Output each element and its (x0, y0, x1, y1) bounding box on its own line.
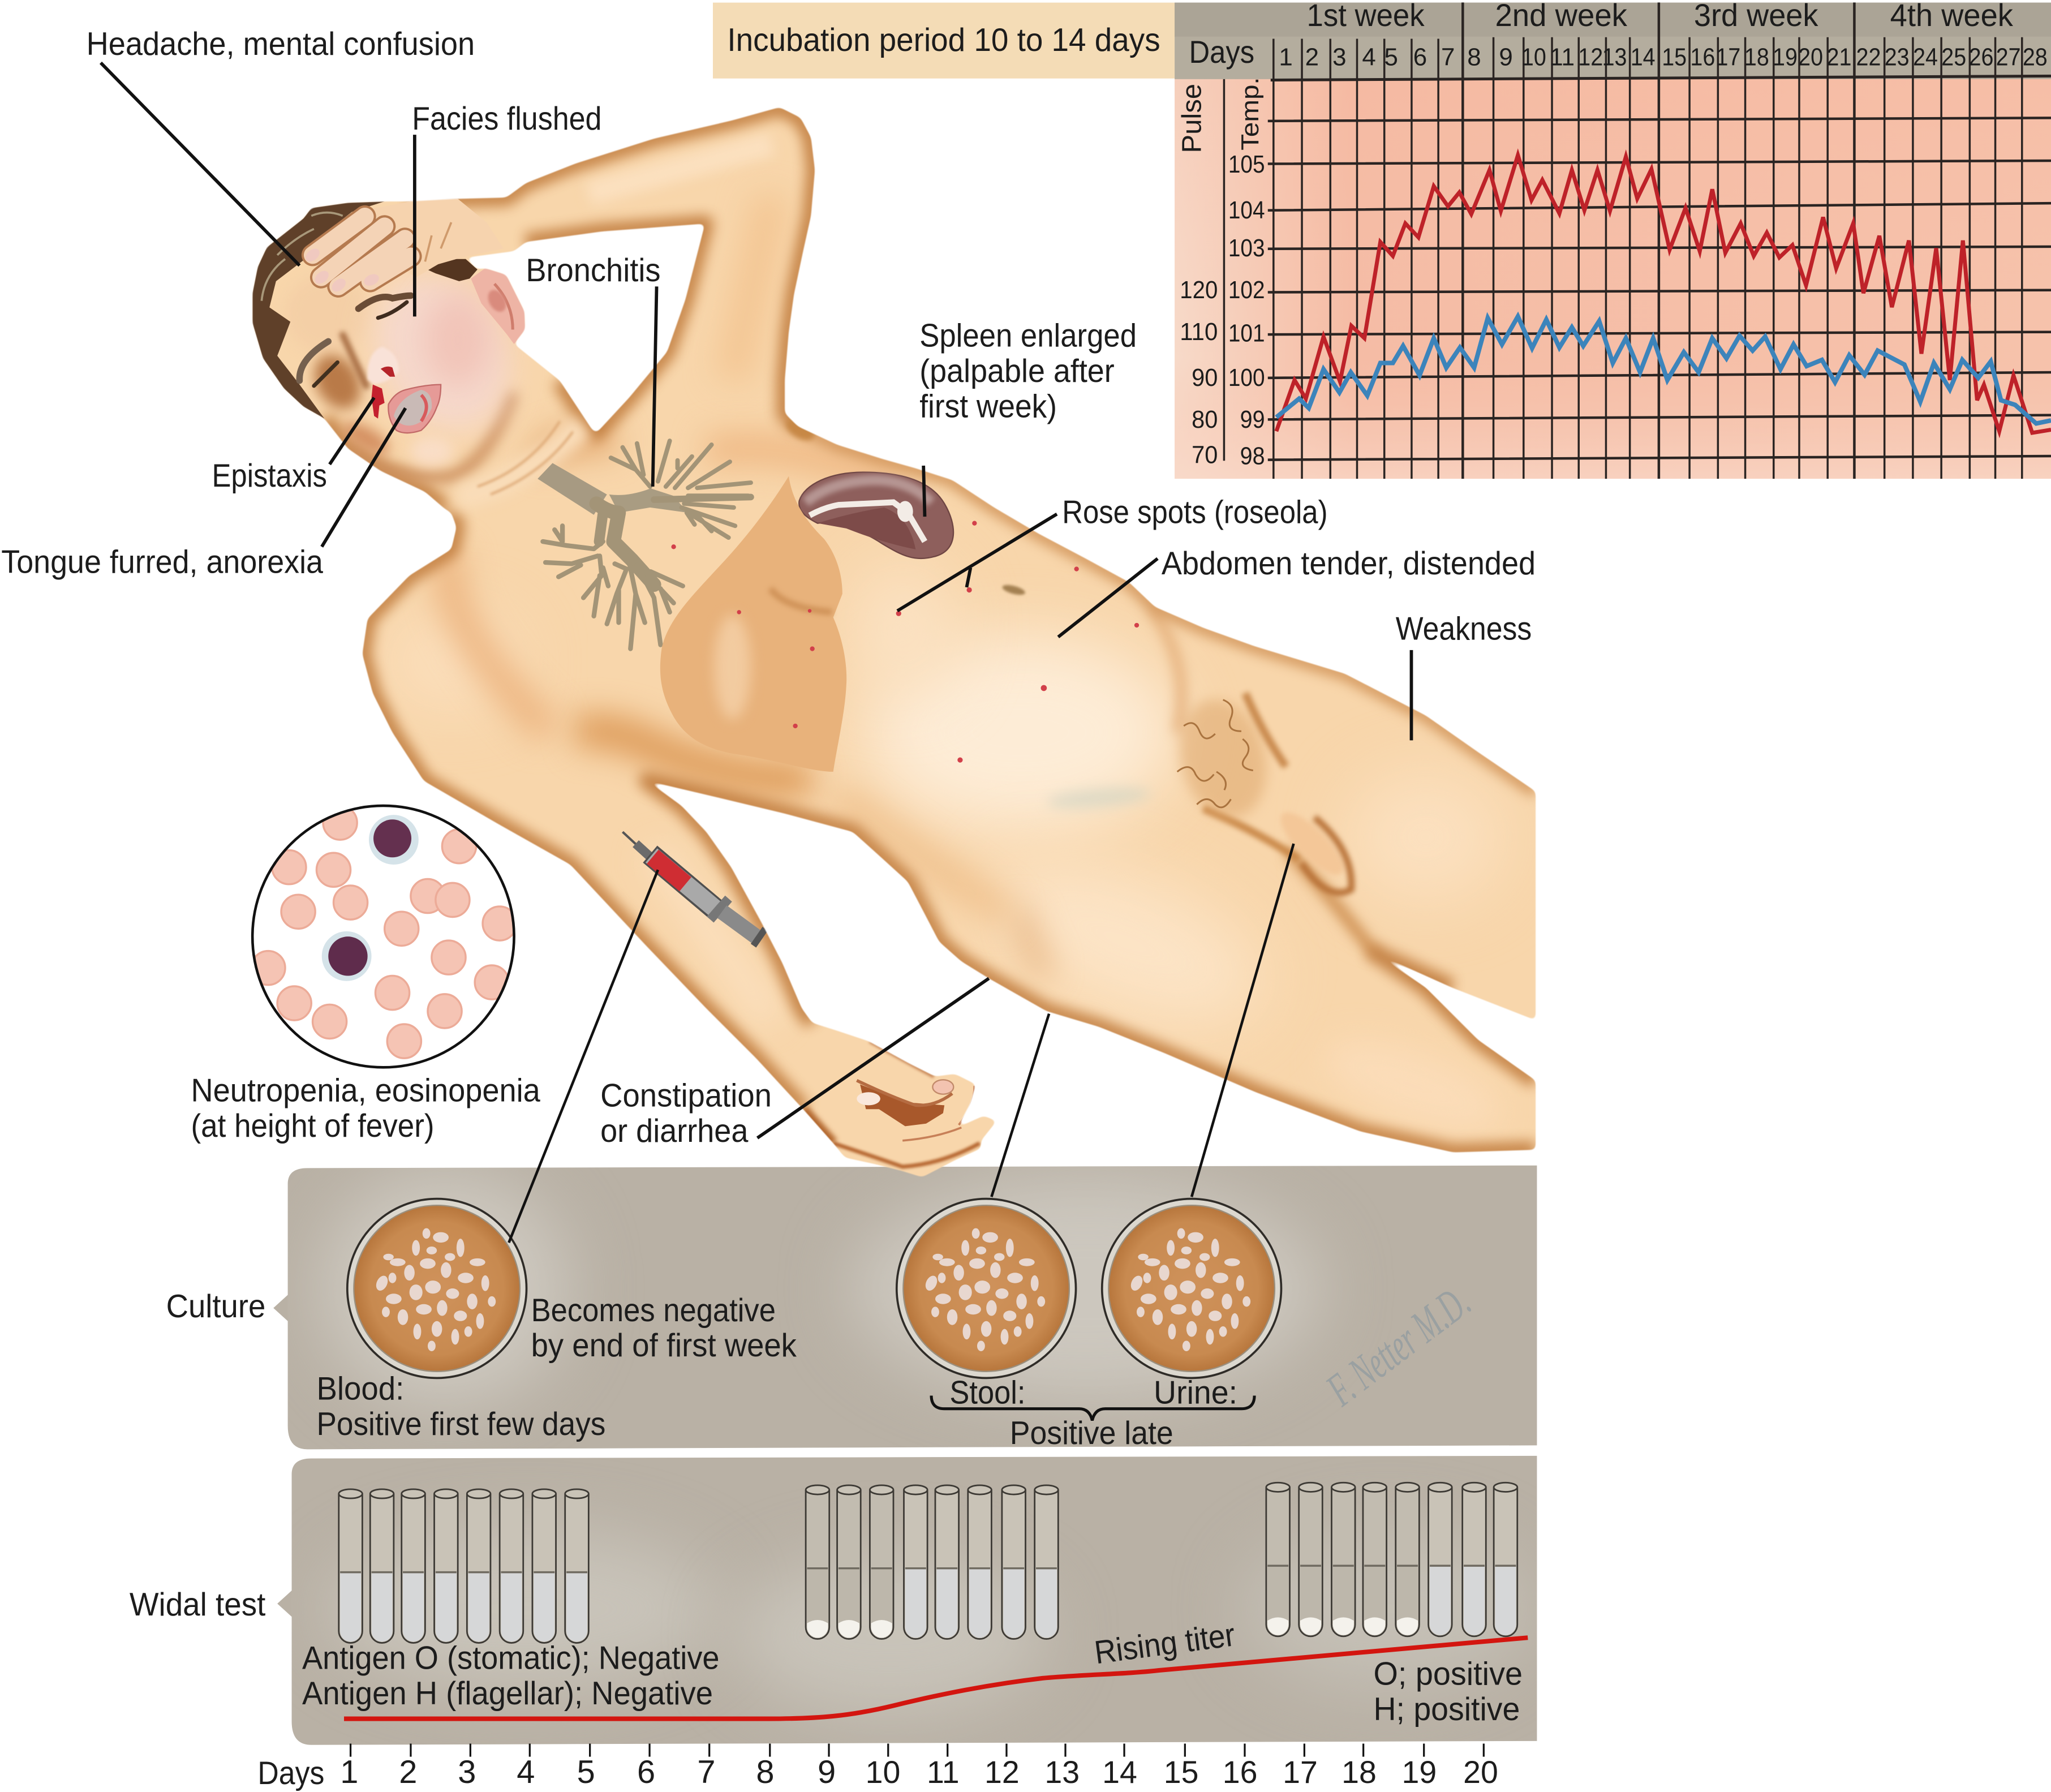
day axis: 10 (866, 1755, 900, 1790)
skin edge darkening: arm, shoulder and underside (324, 108, 1536, 1153)
temperature scale: 101 (1228, 319, 1265, 347)
day numbers: 26 (1969, 44, 1994, 71)
day axis: 16 (1223, 1755, 1257, 1790)
day numbers: 4 (1362, 44, 1376, 71)
day numbers: 2 (1305, 44, 1319, 71)
groin shading (1167, 690, 1352, 893)
label: antigen H negative: Antigen H (flagellar); Negative (302, 1675, 713, 1712)
label: becomes negative: Becomes negative (531, 1292, 776, 1329)
day numbers: 16 (1690, 44, 1715, 71)
label: neutropenia (191, 1072, 541, 1144)
shading on arm, chest, thigh (386, 144, 1510, 1149)
syringe (622, 832, 765, 946)
illustration: patient figure (235, 92, 1543, 1191)
navel (1001, 583, 1026, 597)
label: H positive: H; positive (1373, 1691, 1520, 1727)
culture dish: urine (1102, 1199, 1281, 1378)
day numbers: 24 (1913, 44, 1938, 71)
temperature line (1276, 155, 2051, 433)
label: by end of first week: by end of first week (531, 1327, 797, 1364)
label: headache: Headache, mental confusion (87, 26, 475, 62)
day numbers: 18 (1744, 44, 1769, 71)
label: positive late: Positive late (1010, 1415, 1173, 1451)
label: bronchitis: Bronchitis (526, 252, 660, 289)
day numbers: 14 (1631, 44, 1656, 71)
liver (660, 476, 846, 772)
hair (252, 201, 478, 419)
temperature scale: 100 (1228, 364, 1265, 392)
day axis: 6 (637, 1754, 655, 1790)
day numbers: 23 (1885, 44, 1910, 71)
inset: blood smear circle (251, 806, 517, 1067)
day axis: 17 (1283, 1755, 1318, 1790)
nose with epistaxis (367, 347, 399, 419)
day axis: 2 (399, 1754, 417, 1790)
day axis: 5 (577, 1754, 595, 1790)
temperature scale: 99 (1240, 406, 1265, 433)
mouth with furred tongue (388, 385, 441, 433)
day axis: 1 (340, 1754, 358, 1790)
leader lines (101, 63, 1411, 1243)
panel: Widal test (277, 1456, 1537, 1745)
temperature scale: 102 (1228, 276, 1265, 304)
day axis: 12 (984, 1755, 1020, 1790)
week headings (1307, 0, 2013, 33)
day axis: 18 (1341, 1755, 1377, 1790)
label: epistaxis: Epistaxis (212, 458, 327, 494)
label: culture: Culture (166, 1288, 265, 1325)
hand on forehead (303, 199, 504, 294)
day numbers (1279, 44, 2048, 71)
label: blood: Blood: (316, 1370, 404, 1407)
label: rose spots: Rose spots (roseola) (1062, 495, 1328, 531)
day numbers: 3 (1332, 44, 1347, 71)
face (285, 252, 537, 466)
label: facies flushed: Facies flushed (412, 101, 601, 137)
signature: F. Netter M.D. (1317, 1275, 1480, 1416)
pulse scale: 110 (1180, 318, 1218, 346)
axis title: temp: Temp. (1236, 77, 1264, 151)
pulse line (1276, 316, 2051, 423)
day numbers: 20 (1798, 44, 1823, 71)
chart grid (1224, 2, 2051, 479)
panel: culture (273, 1166, 1537, 1451)
spleen (799, 472, 953, 558)
callout: incubation period (713, 3, 1175, 79)
day numbers: 1 (1279, 44, 1293, 71)
day numbers: 17 (1715, 44, 1740, 71)
eyes and brows (299, 295, 411, 386)
label: stool: Stool: (949, 1374, 1025, 1411)
days heading: Days (1189, 35, 1254, 70)
axis title: pulse: Pulse (1176, 84, 1207, 153)
day numbers: 27 (1996, 44, 2021, 71)
temperature scale: 105 (1228, 151, 1265, 178)
label: spleen enlarged (919, 318, 1137, 424)
label: neutropenia: Neutropenia, eosinopenia (191, 1072, 541, 1108)
label: rising titer: Rising titer (1093, 1617, 1237, 1671)
test tubes: first group (339, 1489, 588, 1643)
day numbers: 28 (2023, 44, 2048, 71)
label: weakness: Weakness (1396, 611, 1532, 647)
chart background (1175, 3, 2051, 479)
label: urine: Urine: (1154, 1374, 1237, 1411)
day numbers: 7 (1441, 44, 1455, 71)
day numbers: 9 (1499, 44, 1513, 71)
label: constipation: Constipation (600, 1078, 772, 1114)
day axis: 15 (1164, 1755, 1198, 1790)
day axis: 14 (1102, 1755, 1137, 1790)
day numbers: 22 (1856, 44, 1881, 71)
day numbers: 21 (1827, 44, 1851, 71)
temperature scale: 104 (1228, 196, 1265, 224)
day numbers: 13 (1602, 44, 1627, 71)
rising titer curve (344, 1638, 1528, 1719)
test tubes: second group (806, 1485, 1058, 1639)
day axis: 11 (927, 1755, 960, 1790)
day numbers: 19 (1773, 44, 1798, 71)
day axis: 9 (818, 1754, 836, 1790)
day numbers: 10 (1521, 44, 1546, 71)
day numbers: 15 (1662, 44, 1687, 71)
hand with cupped palm (803, 1041, 980, 1167)
day axis: 4 (517, 1754, 535, 1790)
label: tongue: Tongue furred, anorexia (1, 544, 324, 581)
pulse scale: 70 (1192, 441, 1218, 469)
label: neutropenia: (at height of fever) (191, 1108, 435, 1144)
culture dish: blood (347, 1199, 527, 1378)
white blood cell (369, 815, 419, 865)
pulse scale: 120 (1180, 276, 1218, 304)
skin edge darkening: upper torso and leg (798, 427, 1536, 792)
day axis: 8 (756, 1754, 775, 1790)
day axis: 3 (458, 1754, 476, 1790)
bronchi (538, 441, 751, 649)
day numbers: 11 (1550, 44, 1575, 71)
label: spleen enlarged: first week) (919, 388, 1057, 424)
pulse scale: 90 (1192, 364, 1218, 392)
red blood cells (251, 806, 517, 1058)
temperature scale (1228, 151, 1265, 470)
pulse scale: 80 (1192, 406, 1218, 433)
pulse scale (1180, 276, 1218, 469)
label: spleen enlarged: (palpable after (919, 353, 1115, 389)
callout: incubation period: Incubation period 10 to 14 days (727, 22, 1160, 58)
day axis: 20 (1463, 1755, 1498, 1790)
label: positive first few days: Positive first few days (316, 1406, 605, 1442)
day numbers: 5 (1384, 44, 1398, 71)
day numbers: 25 (1941, 44, 1966, 71)
culture dish: stool (897, 1199, 1076, 1378)
day axis: 7 (697, 1754, 715, 1790)
label: O positive: O; positive (1373, 1656, 1523, 1692)
temperature scale: 103 (1228, 234, 1265, 262)
temperature scale: 98 (1240, 442, 1265, 470)
label: antigen O negative: Antigen O (stomatic); Negative (302, 1640, 720, 1677)
label: abdomen: Abdomen tender, distended (1162, 545, 1536, 582)
test tubes: third group (1266, 1482, 1517, 1636)
label: spleen enlarged: Spleen enlarged (919, 318, 1137, 354)
day axis: 19 (1402, 1755, 1437, 1790)
day numbers: 6 (1413, 44, 1427, 71)
label: constipation (600, 1078, 772, 1149)
fever chart (1175, 0, 2051, 479)
day axis (257, 1743, 1498, 1791)
day axis: 13 (1044, 1755, 1080, 1790)
label: constipation: or diarrhea (600, 1113, 749, 1149)
brace (931, 1396, 1254, 1420)
ear (471, 268, 525, 344)
day numbers: 12 (1578, 44, 1603, 71)
neck and jaw shading (348, 393, 819, 497)
day axis: Days (257, 1755, 324, 1791)
label: widal test: Widal test (130, 1587, 265, 1623)
day numbers: 8 (1467, 44, 1481, 71)
white blood cell (322, 931, 372, 981)
rose spots (671, 521, 1139, 763)
